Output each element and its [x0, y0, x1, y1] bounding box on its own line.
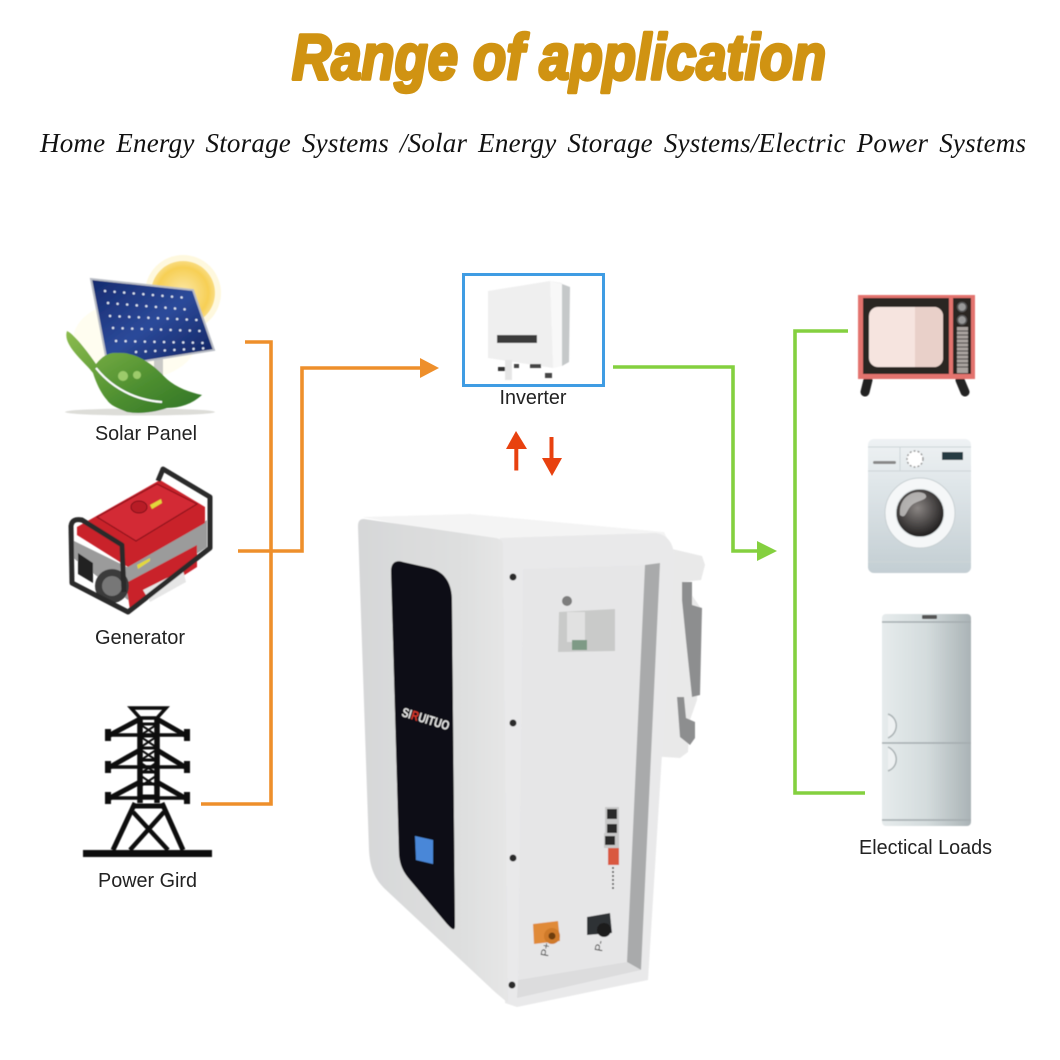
upper grey bracket [682, 582, 702, 697]
icon: washing machine [868, 439, 971, 573]
panel: battery unit [358, 514, 705, 1007]
RJ45 ports [604, 807, 619, 848]
wall bracket plate [650, 545, 705, 758]
label: power grid: Power Gird [98, 870, 197, 892]
battery side face [358, 519, 508, 1003]
arrow: battery charge up [506, 431, 527, 470]
lower grey bracket [677, 697, 695, 745]
black front display strip [391, 561, 455, 929]
indicator dots [612, 867, 614, 889]
title: Range of application [292, 21, 826, 93]
label: generator: Generator [95, 627, 185, 649]
brand logo: SIRUITUO [400, 705, 451, 733]
arrow: orange source lines [201, 342, 439, 804]
label: electrical loads: Electical Loads [859, 837, 992, 859]
connector labels: P- [593, 939, 607, 953]
subtitle: Home Energy Storage Systems /Solar Energy Storage Systems/Electric Power Systems [39, 128, 1026, 158]
panel: inverter box [464, 274, 604, 386]
DIP switch [608, 848, 619, 865]
negative connector [587, 913, 612, 937]
connector labels: P+ [539, 942, 553, 958]
arrow: battery discharge down [542, 437, 562, 476]
battery top surface [362, 514, 674, 552]
back panel [518, 565, 645, 980]
recessed grey band [627, 563, 660, 970]
label: inverter: Inverter [500, 387, 567, 409]
icon: solar panel [65, 255, 221, 416]
LCD screen [415, 836, 433, 864]
screws [508, 574, 516, 988]
battery rim [500, 533, 674, 1007]
positive connector [533, 921, 560, 944]
icon: generator [71, 469, 210, 612]
label: solar panel: Solar Panel [95, 423, 197, 445]
icon: refrigerator [882, 614, 971, 826]
icon: television [858, 295, 975, 392]
connector labels [539, 939, 607, 958]
icon: power tower [83, 708, 212, 857]
arrow: green output lines [613, 331, 865, 793]
breaker [558, 596, 615, 652]
